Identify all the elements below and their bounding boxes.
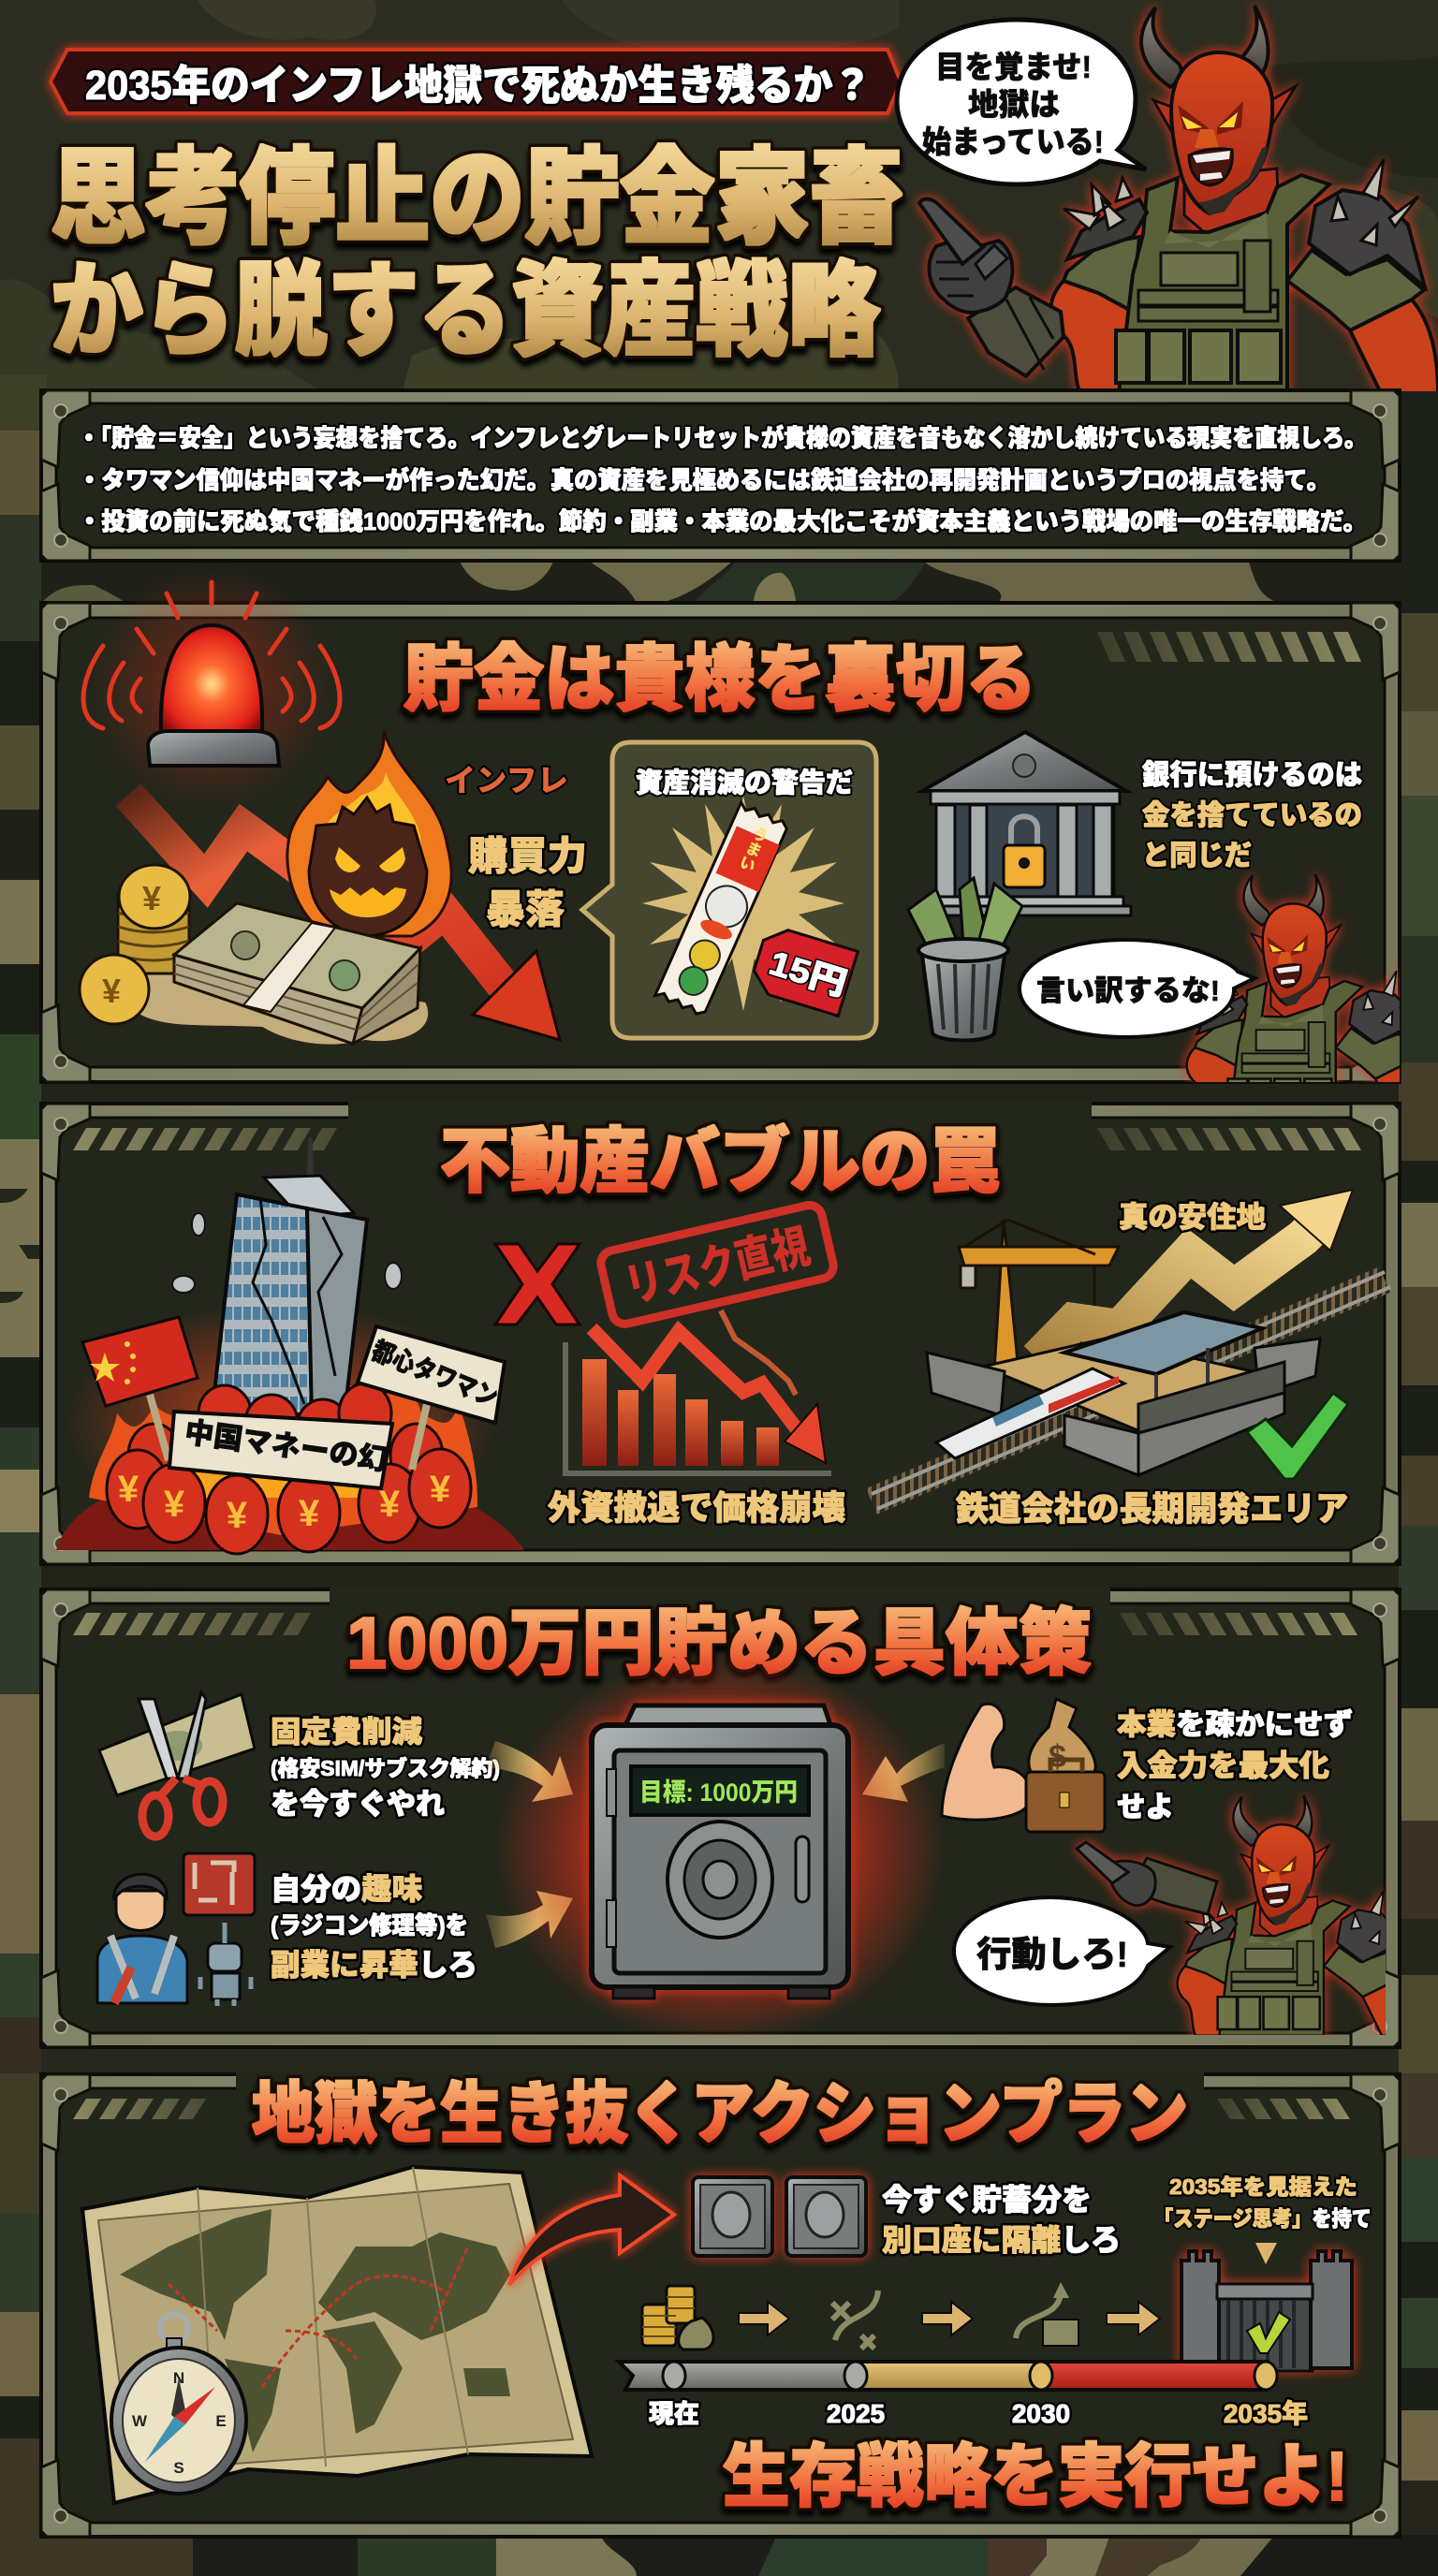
compass: S <box>173 2459 184 2477</box>
small demon <box>1177 869 1400 1082</box>
illustration: collapsing tower on burning yen: ¥ <box>227 1495 248 1536</box>
text: turn hobby into side job <box>271 1872 477 1982</box>
candy bag: うまい <box>735 823 770 873</box>
speech bubble: wake up <box>897 20 1146 184</box>
illustration: collapsing tower on burning yen: ¥ <box>118 1469 139 1510</box>
heading: 貯金は貴様を裏切る <box>404 637 1036 720</box>
demon pointing arm <box>1077 1842 1217 1914</box>
price tag <box>749 924 858 1016</box>
hazard stripes <box>73 1128 337 1150</box>
icon: inflation flame monster <box>287 731 451 936</box>
timeline labels: 2025 <box>827 2399 885 2428</box>
caption: railway area: 鉄道会社の長期開発エリア <box>956 1489 1348 1528</box>
green check <box>1247 1393 1348 1479</box>
main title <box>51 139 904 369</box>
illustration: collapsing tower on burning yen: ¥ <box>430 1469 451 1510</box>
icons: two safes <box>693 2177 866 2256</box>
compass: E <box>215 2412 227 2430</box>
demon pointing arm <box>919 199 1064 376</box>
timeline labels <box>649 2399 1308 2428</box>
icon: cash in trash can <box>908 878 1022 1041</box>
text: bank deposits <box>1142 760 1362 871</box>
text: isolate savings: 今すぐ貯蓄分を <box>882 2183 1092 2217</box>
label: purchasing power crash <box>468 834 587 931</box>
speech bubble: wake up: 始まっている! <box>922 124 1104 159</box>
icon: coins and bag <box>642 2286 713 2349</box>
speech bubble: no excuses <box>1020 940 1255 1037</box>
text: maximize income: 入金力を最大化 <box>1117 1749 1329 1782</box>
label: true safe haven: 真の安住地 <box>1119 1201 1266 1234</box>
icon: muscle arm, money bag and briefcase: $ <box>1049 1739 1066 1775</box>
sign: downtown tower: 都心タワマン <box>368 1336 502 1412</box>
panel 2: real estate bubble trap <box>41 1101 1400 1564</box>
illustration: collapsing tower on burning yen: ¥ <box>379 1484 401 1525</box>
panel 3: concrete plan for 10 million yen <box>41 1587 1417 2047</box>
text: bank deposits: と同じだ <box>1142 841 1252 871</box>
header ribbon <box>51 50 901 113</box>
compass <box>111 2314 246 2494</box>
speech bubble: wake up: 目を覚ませ! <box>935 50 1092 84</box>
speech bubble: no excuses: 言い訳するな! <box>1036 974 1220 1007</box>
illustration: world map <box>82 2167 592 2503</box>
candy bag <box>655 802 789 1017</box>
red cross <box>495 1244 580 1325</box>
icon: scissors cutting bill <box>99 1692 255 1837</box>
text: maximize income: 本業を疎かにせず <box>1117 1708 1353 1741</box>
main demon character <box>919 6 1438 393</box>
label: purchasing power crash: 暴落 <box>486 887 565 931</box>
text: bank deposits: 銀行に預けるのは <box>1142 760 1362 791</box>
panel 4: action plan <box>41 2071 1400 2537</box>
text: cut fixed costs: (格安SIM/サブスク解約) <box>271 1756 500 1780</box>
crane <box>959 1220 1119 1371</box>
illustration: collapsing tower on burning yen: ¥ <box>299 1493 320 1534</box>
text: isolate savings <box>882 2183 1121 2257</box>
main title: から脱する資産戦略 <box>51 254 880 369</box>
heading: 不動産バブルの罠 <box>440 1122 1000 1202</box>
text: isolate savings: 別口座に隔離しろ <box>882 2223 1121 2257</box>
label: inflation: インフレ <box>445 763 568 798</box>
text: bank deposits: 金を捨てているの <box>1142 800 1362 831</box>
timeline labels: 現在 <box>649 2400 699 2428</box>
sign: china money: 中国マネーの幻 <box>183 1415 389 1476</box>
illustration: collapsing tower on burning yen: ¥ <box>164 1484 185 1525</box>
compass: N <box>173 2369 184 2387</box>
illustration: railway development <box>872 1190 1390 1509</box>
closing slogan: 生存戦略を実行せよ! <box>723 2437 1348 2515</box>
text: turn hobby into side job: 副業に昇華しろ <box>271 1948 477 1982</box>
flag <box>82 1317 198 1460</box>
speech bubble: take action <box>954 1897 1170 2005</box>
icon: target safe: 目標: 1000万円 <box>639 1778 798 1807</box>
text: cut fixed costs: を今すぐやれ <box>271 1788 445 1821</box>
arrow 3 <box>1107 2302 1160 2335</box>
text: maximize income: せよ <box>1117 1791 1174 1823</box>
speech bubble: wake up: 地獄は <box>968 87 1060 122</box>
label: purchasing power crash: 購買力 <box>468 834 587 878</box>
text: stage thinking: 「ステージ思考」を持て <box>1153 2206 1372 2231</box>
hazard stripes <box>73 1613 311 1635</box>
sign: downtown tower <box>358 1326 505 1470</box>
timeline <box>619 2362 1308 2428</box>
icon: locked bank <box>922 732 1131 915</box>
main title: 思考停止の貯金家畜 <box>51 139 904 256</box>
stamp: face the risk <box>598 1203 836 1326</box>
starburst <box>642 796 844 1011</box>
arrow 1 <box>739 2302 789 2335</box>
icon: person with hobby tools and robot <box>97 1853 255 2006</box>
timeline labels: 2030 <box>1012 2399 1070 2428</box>
process icons and arrows <box>642 2282 1160 2349</box>
text: cut fixed costs: 固定費削減 <box>271 1715 422 1749</box>
text: maximize income <box>1117 1708 1353 1823</box>
falling red arrow <box>128 795 560 1040</box>
icon: fortress with check <box>1181 2243 1352 2371</box>
icon: siren <box>83 566 340 810</box>
small pointing demon <box>1077 1795 1417 2036</box>
text: cut fixed costs <box>271 1715 500 1821</box>
panel: summary <box>41 390 1400 561</box>
arrows into safe <box>486 1741 945 1948</box>
icon: melting cash and coins <box>80 865 429 1046</box>
icon: branching path and briefcase <box>1016 2282 1078 2346</box>
price tag: 15円 <box>765 945 851 1003</box>
summary bullets: ・タワマン信仰は中国マネーが作った幻だ。真の資産を見極めるには鉄道会社の再開発計画というプロの視点を持て。 <box>78 466 1330 494</box>
summary bullets <box>78 424 1367 535</box>
text: turn hobby into side job: 自分の趣味 <box>271 1872 422 1906</box>
speech bubble: take action: 行動しろ! <box>976 1936 1128 1975</box>
text: stage thinking: 2035年を見据えた <box>1169 2174 1357 2199</box>
illustration: collapsing tower on burning yen <box>56 1138 524 1554</box>
arrow 2 <box>922 2302 973 2335</box>
panel 1: savings betray you <box>41 566 1431 1119</box>
hazard stripes <box>73 2099 206 2119</box>
chart: price collapse <box>565 1310 831 1473</box>
icon: melting cash and coins: ¥ <box>102 972 121 1010</box>
callout: asset loss warning <box>582 742 876 1038</box>
stamp: face the risk: リスク直視 <box>621 1220 814 1313</box>
text: turn hobby into side job: (ラジコン修理等)を <box>271 1911 468 1939</box>
heading: 地獄を生き抜くアクションプラン <box>252 2077 1188 2152</box>
icon: melting cash and coins: ¥ <box>142 879 161 917</box>
icon: target safe <box>495 1652 945 2045</box>
summary bullets: ・「貯金＝安全」という妄想を捨てろ。インフレとグレートリセットが貴様の資産を音もなく溶かし続けている現実を直視しろ。 <box>78 424 1367 452</box>
compass: W <box>132 2412 148 2430</box>
glowing curved arrow <box>509 2175 674 2285</box>
text: stage thinking <box>1153 2174 1372 2231</box>
caption: foreign capital: 外資撤退で価格崩壊 <box>548 1488 845 1527</box>
callout: asset loss warning: 資産消滅の警告だ <box>636 768 853 798</box>
timeline labels: 2035年 <box>1224 2399 1308 2428</box>
icon: muscle arm, money bag and briefcase <box>942 1699 1105 1832</box>
summary bullets: ・投資の前に死ぬ気で種銭1000万円を作れ。節約・副業・本業の最大化こそが資本主義という戦場の唯一の生存戦略だ。 <box>78 507 1367 535</box>
header ribbon: 2035年のインフレ地獄で死ぬか生き残るか？ <box>85 63 872 109</box>
yen coins <box>107 1383 471 1554</box>
hazard stripes <box>1097 632 1361 662</box>
heading: 1000万円貯める具体策 <box>346 1602 1092 1684</box>
icon: strategy chart <box>832 2291 878 2349</box>
